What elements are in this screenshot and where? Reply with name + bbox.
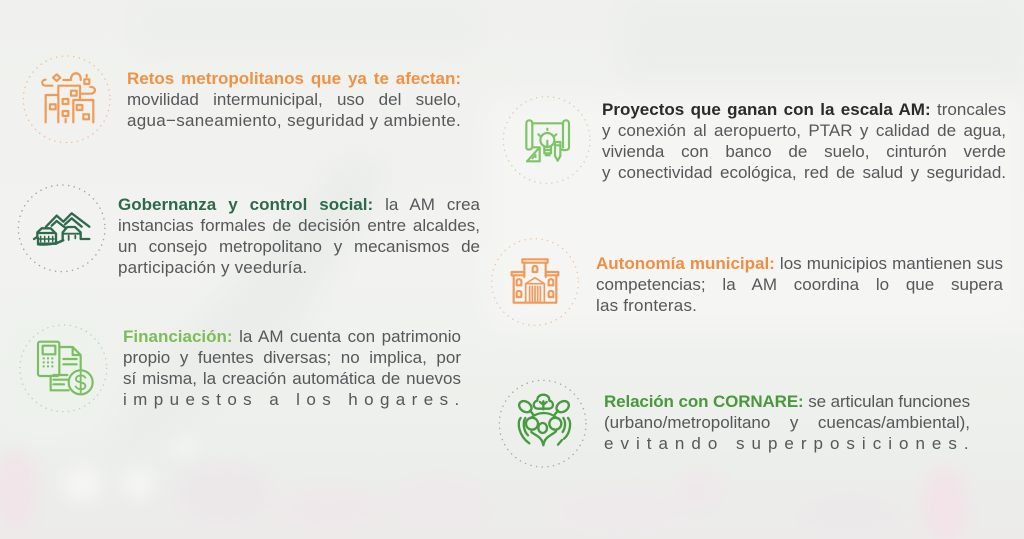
panel: gobernanza y control social bbox=[18, 184, 480, 277]
text: gobernanza: participación y veeduría. bbox=[118, 258, 307, 277]
text: gobernanza: un consejo metropolitano y mecanismos de bbox=[118, 237, 480, 256]
text: relación bbox=[604, 392, 976, 453]
text: relación: (urbano/metropolitano y cuencas/ambiental), bbox=[604, 413, 970, 432]
text: gobernanza bbox=[118, 195, 480, 277]
text: proyectos: vivienda con banco de suelo, cinturón verde bbox=[602, 142, 1006, 161]
text: retos metropolitanos bbox=[127, 69, 461, 130]
text: autonomía: competencias; la AM coordina lo que supera bbox=[596, 275, 1003, 294]
text: retos metropolitanos: agua−saneamiento, seguridad y ambiente. bbox=[127, 111, 461, 130]
text: retos metropolitanos: movilidad intermunicipal, uso del suelo, bbox=[127, 90, 461, 109]
text: autonomía: Autonomía municipal: los municipios mantienen sus bbox=[596, 254, 1003, 273]
icon: calculator, document and coin bbox=[19, 324, 108, 412]
text: autonomía: las fronteras. bbox=[596, 296, 697, 315]
text: gobernanza: Gobernanza y control social: la AM crea bbox=[118, 195, 480, 214]
text: proyectos: y conexión al aeropuerto, PTAR y calidad de agua, bbox=[602, 121, 1006, 140]
panel: proyectos escala AM bbox=[502, 96, 1006, 184]
text: financiación: propio y fuentes diversas; no implica, por bbox=[123, 348, 461, 367]
icon: mountains and houses bbox=[18, 184, 106, 272]
text: financiación bbox=[123, 327, 466, 409]
icon: blueprint with bulb, ruler and pencil bbox=[502, 96, 591, 184]
icon: hands holding trees and people bbox=[498, 380, 587, 468]
text: gobernanza: instancias formales de decisión entre alcaldes, bbox=[118, 216, 480, 235]
panel: retos metropolitanos bbox=[22, 55, 461, 144]
text: financiación: Financiación: la AM cuenta con patrimonio bbox=[123, 327, 461, 346]
panel: relación con CORNARE bbox=[498, 380, 976, 468]
text: proyectos bbox=[602, 100, 1006, 182]
icon: city buildings with wind bbox=[22, 55, 111, 144]
text: relación: evitando superposiciones. bbox=[604, 434, 976, 453]
text: financiación: sí misma, la creación automática de nuevos bbox=[123, 369, 461, 388]
text: autonomía bbox=[596, 254, 1003, 315]
text: proyectos: Proyectos que ganan con la escala AM: troncales bbox=[602, 100, 1006, 119]
panel: autonomía municipal bbox=[491, 238, 1003, 326]
text: proyectos: y conectividad ecológica, red de salud y seguridad. bbox=[602, 163, 1006, 182]
text: financiación: impuestos a los hogares. bbox=[123, 390, 466, 409]
text: relación: Relación con CORNARE: se articulan funciones bbox=[604, 392, 970, 411]
icon: municipal palace bbox=[491, 238, 579, 326]
text: retos metropolitanos: Retos metropolitanos que ya te afectan: bbox=[127, 69, 461, 88]
panel: financiación bbox=[19, 324, 466, 412]
